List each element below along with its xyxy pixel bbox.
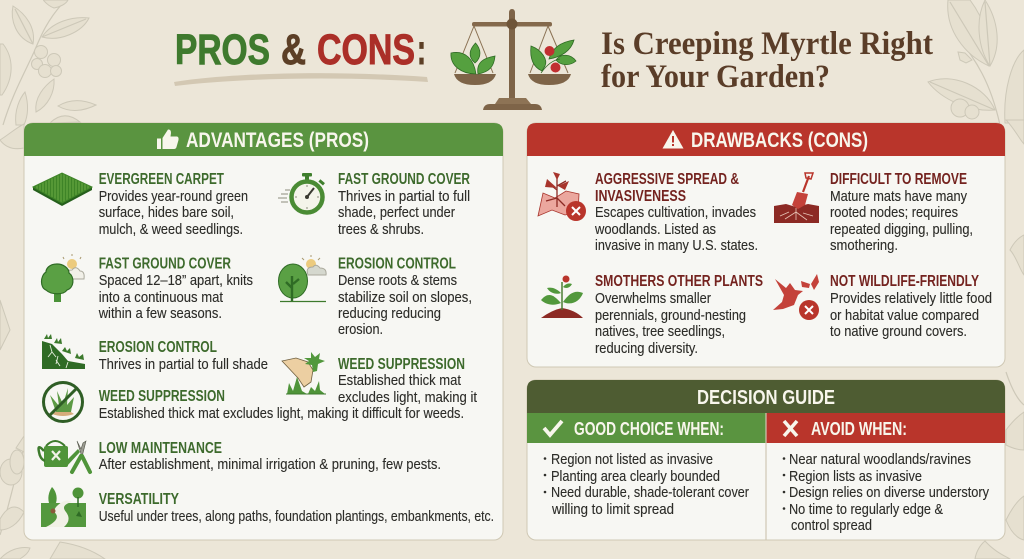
icon: bird and butterfly	[773, 274, 819, 320]
item: difficult to remove	[774, 171, 973, 254]
item: fast ground cover (stopwatch): Thrives in partial to full	[338, 188, 470, 205]
item: erosion control (tree): erosion.	[338, 321, 383, 338]
item: aggressive spread: AGGRESSIVE SPREAD &	[595, 171, 739, 188]
item: versatility: VERSATILITY	[99, 491, 179, 508]
item: not wildlife-friendly	[773, 273, 992, 340]
column: good choice when	[527, 413, 766, 518]
item: erosion control (tree): stabilize soil on slopes,	[338, 289, 472, 306]
item: erosion control (tree): reducing reducing	[338, 305, 441, 322]
item: evergreen carpet: Provides year-round green	[99, 188, 248, 205]
good choice list: Planting area clearly bounded	[551, 468, 720, 485]
item: evergreen carpet: surface, hides bare soil,	[99, 204, 234, 221]
item: versatility: Useful under trees, along paths, foundation plantings, embankments, etc.	[99, 508, 494, 525]
item: not wildlife-friendly: or habitat value compared	[830, 307, 979, 324]
item: smothers other plants: reducing diversity.	[595, 340, 698, 357]
item: smothers other plants: SMOTHERS OTHER PLANTS	[595, 273, 763, 290]
icon: shovel and roots	[774, 173, 819, 223]
icon: slope with roots	[42, 334, 85, 369]
panel: decision guide	[527, 380, 1005, 540]
icon: grass carpet	[33, 173, 92, 206]
item: weed suppression (hand): WEED SUPPRESSION	[338, 356, 465, 373]
item: aggressive spread: invasive in many U.S. states.	[595, 237, 758, 254]
item: erosion control (tree): EROSION CONTROL	[338, 256, 456, 273]
subtitle	[601, 26, 933, 95]
panel header: drawbacks: DRAWBACKS (CONS)	[691, 129, 868, 152]
item: weed suppression (hand): excludes light, making it	[338, 389, 478, 406]
avoid list: Region lists as invasive	[789, 468, 922, 485]
item: fast ground cover (stopwatch): shade, perfect under	[338, 204, 455, 221]
subtitle: for Your Garden?	[601, 59, 830, 95]
icon: garden path	[41, 487, 86, 527]
item: fast ground cover (tree): within a few seasons.	[98, 305, 222, 322]
avoid list: No time to regularly edge &	[789, 501, 943, 518]
botanical decoration: top right	[928, 0, 1024, 125]
panel header: advantages	[24, 123, 503, 156]
item: weed suppression (hand): Established thick mat	[338, 372, 462, 389]
icon: balance scale with plants	[451, 9, 576, 110]
item: weed suppression (no sign): Established thick mat excludes light, making it difficult for weeds.	[99, 405, 464, 422]
item: difficult to remove: Mature mats have many	[830, 188, 967, 205]
title: pros and cons: PROS	[175, 26, 270, 74]
item: weed suppression (no sign)	[44, 382, 464, 422]
panel: advantages (pros)	[24, 123, 503, 540]
item: low maintenance	[39, 440, 441, 473]
icon: watering can and shears	[39, 441, 90, 472]
botanical decoration: lower left	[0, 124, 105, 559]
item: aggressive spread: woodlands. Listed as	[594, 221, 716, 238]
item: smothers other plants	[541, 273, 763, 357]
good choice list	[544, 451, 749, 518]
item: not wildlife-friendly: Provides relatively little food	[830, 290, 992, 307]
item: fast ground cover (stopwatch): FAST GROUND COVER	[338, 171, 470, 188]
title: pros and cons: &	[281, 26, 306, 74]
avoid header	[766, 413, 1005, 443]
avoid list: control spread	[791, 517, 872, 534]
good choice header: GOOD CHOICE WHEN:	[574, 418, 724, 439]
item: difficult to remove: smothering.	[830, 237, 898, 254]
icon: smothered sprout	[541, 276, 583, 318]
item: not wildlife-friendly: NOT WILDLIFE-FRIENDLY	[830, 273, 979, 290]
item: aggressive spread: INVASIVENESS	[595, 188, 686, 205]
botanical decoration: top left	[0, 0, 96, 125]
icon: hand pulling weed	[282, 352, 326, 394]
avoid list: Near natural woodlands/ravines	[789, 451, 971, 468]
item: erosion control (slope)	[42, 334, 268, 373]
item: erosion control (slope): EROSION CONTROL	[99, 339, 217, 356]
item: versatility	[41, 487, 494, 527]
item: smothers other plants: natives, tree seedlings,	[595, 323, 725, 340]
decision guide header: DECISION GUIDE	[697, 386, 835, 409]
title: pros and cons: CONS	[317, 26, 415, 74]
avoid list: Design relies on diverse understory	[789, 484, 989, 501]
botanical decoration: right edge	[975, 120, 1024, 559]
item: aggressive spread	[538, 171, 758, 254]
item: low maintenance: LOW MAINTENANCE	[99, 440, 222, 457]
item: fast ground cover (tree)	[42, 254, 253, 322]
decision guide header	[527, 380, 1005, 413]
item: difficult to remove: DIFFICULT TO REMOVE	[830, 171, 967, 188]
panel: drawbacks (cons)	[527, 123, 1005, 367]
title: pros and cons	[175, 26, 426, 74]
item: weed suppression (hand)	[282, 352, 478, 406]
good choice list: Region not listed as invasive	[551, 451, 713, 468]
item: evergreen carpet	[33, 171, 248, 238]
item: low maintenance: After establishment, minimal irrigation & pruning, few pests.	[99, 456, 441, 473]
subtitle: Is Creeping Myrtle Right	[601, 26, 933, 62]
item: weed suppression (no sign): WEED SUPPRESSION	[99, 388, 225, 405]
column: avoid when	[766, 413, 1005, 534]
item: erosion control (tree): Dense roots & stems	[338, 272, 457, 289]
item: aggressive spread: Escapes cultivation, invades	[595, 204, 756, 221]
avoid list	[783, 451, 989, 534]
item: fast ground cover (stopwatch)	[278, 171, 470, 238]
good choice list: Need durable, shade-tolerant cover	[551, 484, 749, 501]
item: difficult to remove: rooted nodes; requires	[830, 204, 958, 221]
item: fast ground cover (tree): into a continuous mat	[99, 289, 224, 306]
item: fast ground cover (tree): FAST GROUND COVER	[99, 256, 231, 273]
item: evergreen carpet: mulch, & weed seedlings.	[99, 221, 243, 238]
icon: stopwatch	[278, 173, 325, 212]
good choice header	[527, 413, 766, 443]
good choice list: willing to limit spread	[551, 501, 674, 518]
item: smothers other plants: perennials, ground-nesting	[595, 307, 746, 324]
item: erosion control (tree)	[278, 255, 472, 338]
item: fast ground cover (tree): Spaced 12–18” apart, knits	[99, 272, 253, 289]
icon: map with invasive plant	[538, 172, 586, 221]
item: difficult to remove: repeated digging, pulling,	[830, 221, 973, 238]
title: pros and cons: :	[417, 26, 426, 74]
icon: tree on ground	[278, 255, 326, 302]
item: erosion control (slope): Thrives in partial to full shade	[99, 356, 268, 373]
panel header: drawbacks	[527, 123, 1005, 156]
avoid header: AVOID WHEN:	[811, 418, 907, 439]
panel header: advantages: ADVANTAGES (PROS)	[186, 129, 369, 152]
item: evergreen carpet: EVERGREEN CARPET	[99, 171, 224, 188]
icon: no-weed sign	[44, 382, 82, 422]
title underline swoosh	[174, 73, 428, 86]
item: smothers other plants: Overwhelms smaller	[595, 290, 711, 307]
item: fast ground cover (stopwatch): trees & shrubs.	[338, 221, 424, 238]
item: not wildlife-friendly: to native ground covers.	[830, 323, 967, 340]
icon: tree with sun and cloud	[42, 254, 84, 302]
